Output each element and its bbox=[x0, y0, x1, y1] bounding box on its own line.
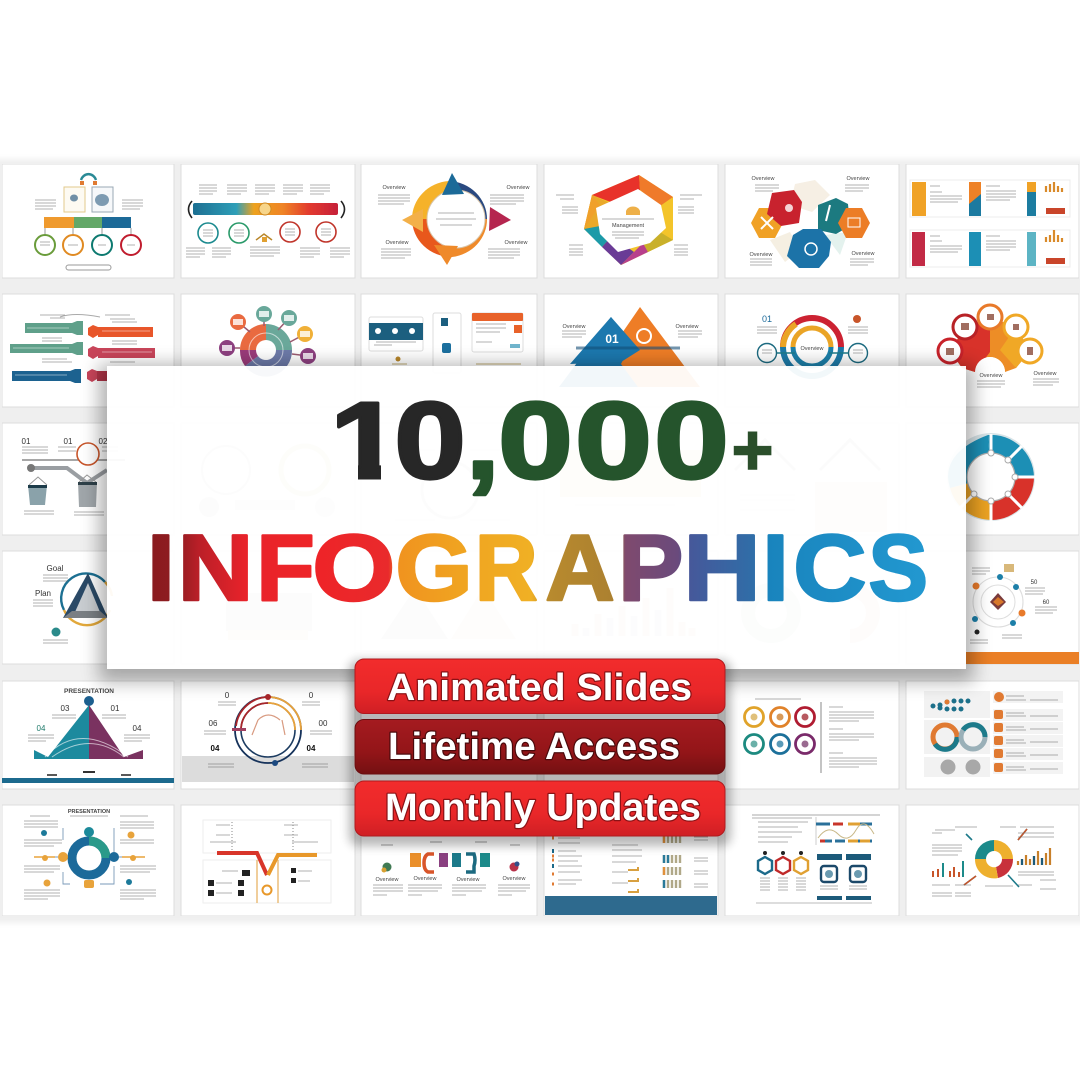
headline: INFOGRAPHICS: F bbox=[256, 515, 315, 620]
slide: ghost bar chart bbox=[544, 551, 718, 664]
headline: INFOGRAPHICS: C bbox=[793, 515, 867, 620]
slide: twin triangles bbox=[544, 294, 718, 407]
slide: screen mockups bbox=[361, 294, 537, 407]
slide: circular arrows: Overview bbox=[386, 240, 408, 246]
headline: INFOGRAPHICS: I bbox=[762, 515, 789, 620]
slide: coloured hexagons: Overview bbox=[847, 176, 869, 182]
hero panel bbox=[107, 366, 966, 669]
hero panel shadow bbox=[99, 364, 974, 682]
slide: twin triangles: Overview bbox=[676, 324, 698, 330]
headline: INFOGRAPHICS: N bbox=[178, 515, 254, 620]
headline: INFOGRAPHICS: P bbox=[618, 515, 683, 620]
slide: orbit diagram: 50 bbox=[1031, 580, 1038, 586]
slide: twin triangles: Overview bbox=[563, 324, 585, 330]
slide: double ring with grey band: 06 bbox=[209, 719, 218, 728]
slide: ghost twin panels bbox=[725, 423, 899, 535]
slide: donut with charts bbox=[906, 805, 1079, 916]
slide: ghost donuts bbox=[725, 551, 899, 664]
badge: Lifetime Access bbox=[355, 720, 725, 774]
slide: orbit diagram bbox=[906, 551, 1079, 664]
slide: hub with spokes: PRESENTATION bbox=[68, 809, 110, 815]
slide: coloured blocks bbox=[361, 805, 537, 916]
slide: ghost clock and circle bbox=[181, 423, 355, 535]
headline: INFOGRAPHICS bbox=[147, 515, 928, 620]
slide: coloured hexagons: Overview bbox=[752, 176, 774, 182]
slide: heptagon ring: Management bbox=[612, 223, 645, 229]
slide: double ring with grey band: 04 bbox=[307, 744, 316, 753]
slide: double ring with grey band: 0 bbox=[309, 691, 314, 700]
slide: buckets and pipe: 02 bbox=[99, 437, 108, 446]
slide: mountain chart: 01 bbox=[111, 704, 120, 713]
headline: 10,000 bbox=[337, 400, 726, 496]
headline plus sign: + bbox=[732, 410, 774, 490]
slide: coloured blocks: Overview bbox=[457, 877, 479, 883]
slide: mini dashboard bbox=[725, 805, 899, 916]
slide: coloured blocks: Overview bbox=[376, 877, 398, 883]
slide: gradient timeline bbox=[181, 164, 355, 278]
headline: 10,000: 0 bbox=[498, 380, 573, 502]
slide: mountain chart bbox=[2, 681, 174, 789]
slide: coloured blocks: Overview bbox=[503, 876, 525, 882]
slide: mountain chart: 04 bbox=[133, 724, 142, 733]
slide: circular arrows bbox=[361, 164, 537, 278]
badge: Monthly Updates: Monthly Updates bbox=[385, 787, 701, 829]
slide: concentric rings bbox=[725, 294, 899, 407]
slide: ghost yellow chart bbox=[544, 423, 718, 535]
slide: mountain chart: 03 bbox=[61, 704, 70, 713]
headline: INFOGRAPHICS: H bbox=[683, 515, 761, 620]
slide: buckets and pipe bbox=[2, 423, 174, 535]
slide: ghost bar box bbox=[181, 551, 355, 664]
slide: two-sided bars bbox=[2, 294, 174, 407]
slide: triangle in ring: Goal bbox=[47, 564, 64, 573]
slide: hidden centre A bbox=[361, 681, 537, 789]
slide: heptagon ring bbox=[544, 164, 718, 278]
slide: buckets and pipe: 01 bbox=[22, 437, 31, 446]
badge: Animated Slides bbox=[355, 659, 725, 714]
headline: INFOGRAPHICS: R bbox=[475, 515, 538, 620]
headline: INFOGRAPHICS: A bbox=[545, 515, 615, 620]
slide: segmented ring bbox=[906, 423, 1079, 535]
slide: double ring with grey band bbox=[181, 681, 355, 789]
headline: 10,000: 0 bbox=[654, 380, 729, 502]
slide: hidden centre B bbox=[544, 681, 718, 789]
slide: concentric rings: 01 bbox=[762, 314, 772, 324]
slide: double ring with grey band: 04 bbox=[211, 744, 220, 753]
badge: Monthly Updates bbox=[355, 781, 725, 836]
slide: two stat cards bbox=[906, 164, 1079, 278]
slide: coloured hexagons bbox=[725, 164, 899, 278]
slide: circular arrows: Overview bbox=[507, 185, 529, 191]
slide: mountain chart: PRESENTATION bbox=[64, 688, 114, 695]
slide: tree with four circles bbox=[2, 164, 174, 278]
slide: donuts with list bbox=[906, 681, 1079, 789]
headline: INFOGRAPHICS: O bbox=[312, 515, 395, 620]
slide: fan of circles: Overview bbox=[980, 373, 1002, 379]
slide: double ring with grey band: 0 bbox=[225, 691, 230, 700]
slide: concentric rings: Overview bbox=[801, 346, 823, 352]
slide: donut with satellites bbox=[181, 294, 355, 407]
slide: triangle in ring: Plan bbox=[35, 589, 51, 598]
headline: 10,000: 1 bbox=[330, 380, 402, 502]
badge: Animated Slides: Animated Slides bbox=[387, 667, 692, 709]
slide: funnel cards bbox=[181, 805, 355, 916]
slide: coloured hexagons: Overview bbox=[750, 252, 772, 258]
headline: INFOGRAPHICS: I bbox=[147, 515, 175, 620]
slide: double ring with grey band: 00 bbox=[319, 719, 328, 728]
slide: coloured hexagons: Overview bbox=[852, 251, 874, 257]
slide: fan of circles: Overview bbox=[1034, 371, 1056, 377]
slide: triangle in ring bbox=[2, 551, 174, 664]
slide: coloured blocks: Overview bbox=[414, 876, 436, 882]
slide thumbnails grid bbox=[2, 164, 1079, 916]
headline: INFOGRAPHICS: S bbox=[868, 515, 928, 620]
headline: 10,000: 0 bbox=[575, 380, 652, 502]
badge: Lifetime Access: Lifetime Access bbox=[388, 726, 680, 768]
slide: buckets and pipe: 01 bbox=[64, 437, 73, 446]
slide: mountain chart: 04 bbox=[37, 724, 46, 733]
slide: list with colour bars bbox=[544, 805, 718, 916]
slide: ghost target bbox=[361, 423, 537, 535]
slide: twin triangles: 01 bbox=[605, 332, 619, 346]
headline: 10,000: 0 bbox=[394, 380, 466, 502]
badge shadow bbox=[349, 660, 731, 846]
slide: six pins with text bbox=[725, 681, 899, 789]
headline: INFOGRAPHICS: G bbox=[395, 515, 473, 620]
slide: circular arrows: Overview bbox=[383, 185, 405, 191]
slide: circular arrows: Overview bbox=[505, 240, 527, 246]
slide: orbit diagram: 60 bbox=[1043, 600, 1050, 606]
headline: 10,000: , bbox=[466, 380, 500, 502]
slide wall background bbox=[0, 159, 1080, 923]
slide: hub with spokes bbox=[2, 805, 174, 916]
slide: ghost triangles bbox=[361, 551, 537, 664]
slide: fan of circles bbox=[906, 294, 1079, 407]
